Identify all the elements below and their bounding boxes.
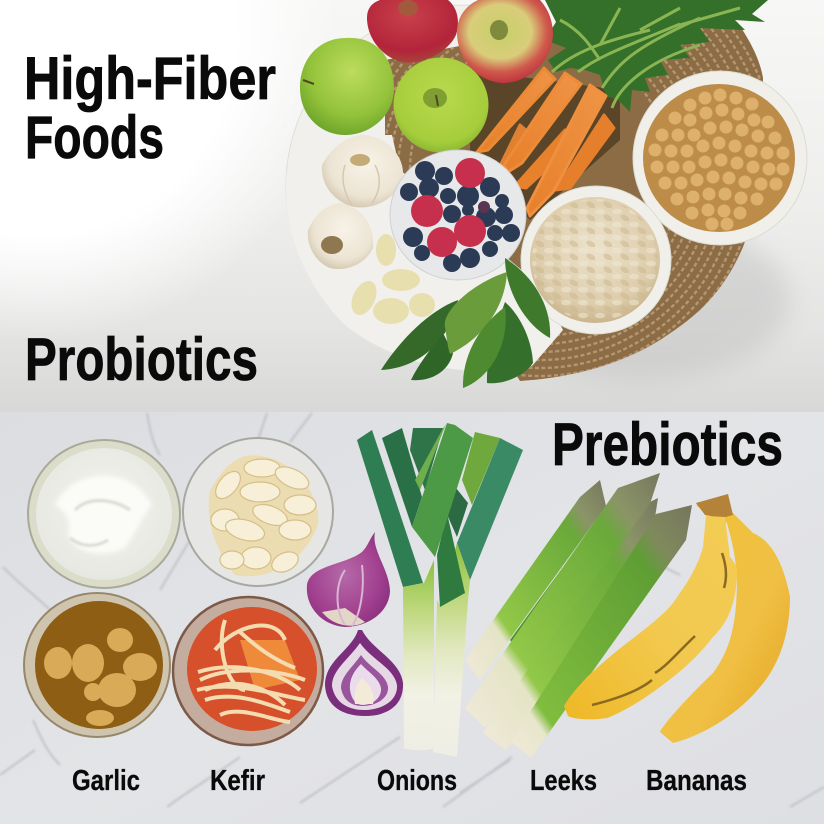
label: bananas: Bananas: [646, 765, 747, 797]
label: kefir: Kefir: [210, 765, 265, 797]
carrot 1: [477, 68, 555, 152]
icon: asparagus: [465, 473, 692, 758]
plate lower section over mat: [286, 135, 563, 371]
carrot behind middle: [515, 130, 576, 188]
icon: garlic bulb top: [322, 135, 403, 207]
icon: leaves: [381, 258, 550, 388]
icon: garlic cloves: [346, 234, 435, 324]
dark green mass between spears: [510, 520, 650, 680]
icon: fermented pickle jar: [24, 593, 170, 737]
carrot behind right: [556, 115, 614, 190]
icon: green apple left: [300, 38, 394, 135]
leaf tall left: [357, 430, 423, 587]
leaf left second: [382, 428, 422, 527]
banana left: [564, 516, 737, 719]
icon: bananas: [564, 494, 790, 743]
spear 4: [511, 505, 692, 758]
leaf far right: [457, 438, 523, 580]
spear 2: [465, 473, 660, 728]
leaf back centre: [410, 428, 443, 490]
shadow under mat: [490, 220, 790, 380]
leaf centre dark: [437, 513, 465, 607]
leaf back dark: [445, 483, 468, 537]
banana stem cap: [696, 494, 733, 518]
carrot 3: [527, 85, 606, 216]
group: carrots: [477, 0, 768, 216]
icon: garlic jar: [183, 438, 333, 586]
icon: green apple centre: [394, 58, 488, 152]
stalk left: [403, 560, 434, 750]
label: garlic: Garlic: [72, 765, 140, 797]
spear 1: [465, 480, 606, 680]
spear 3: [483, 498, 658, 750]
panel: woven mat: [385, 22, 763, 381]
icon: garlic bulb lower: [308, 203, 373, 269]
panel: high-fiber foods background: [0, 0, 824, 412]
carrot behind left: [499, 125, 528, 168]
leaf tip light: [415, 424, 446, 490]
label: leeks: Leeks: [530, 765, 597, 797]
heading: high-fiber foods: [24, 45, 276, 171]
heading: high-fiber foods: High-Fiber: [24, 45, 276, 112]
panel: marble background: [0, 412, 824, 824]
icon: red onion whole: [307, 532, 390, 627]
heading: probiotics: Probiotics: [25, 326, 258, 393]
heading: high-fiber foods: Foods: [25, 104, 164, 171]
carrot tops: [545, 0, 768, 112]
icon: yogurt jar: [28, 440, 180, 588]
panel: white plate: [286, 5, 646, 367]
leaf back right: [462, 432, 500, 505]
icon: red onion half: [325, 630, 403, 716]
icon: leeks: [357, 423, 523, 757]
stalk right: [433, 543, 470, 757]
banana right: [660, 497, 790, 743]
label: onions: Onions: [377, 765, 457, 797]
leaf centre: [412, 423, 473, 557]
icon: kimchi jar: [173, 597, 323, 745]
carrot 2: [504, 73, 581, 172]
dark mat shade under carrots: [470, 70, 620, 220]
icon: chickpea bowl: [633, 71, 807, 245]
icon: oats bowl: [521, 186, 671, 334]
icon: berries bowl: [390, 150, 526, 280]
icon: red apple right: [457, 0, 553, 83]
icon: red apple top: [367, 0, 458, 63]
